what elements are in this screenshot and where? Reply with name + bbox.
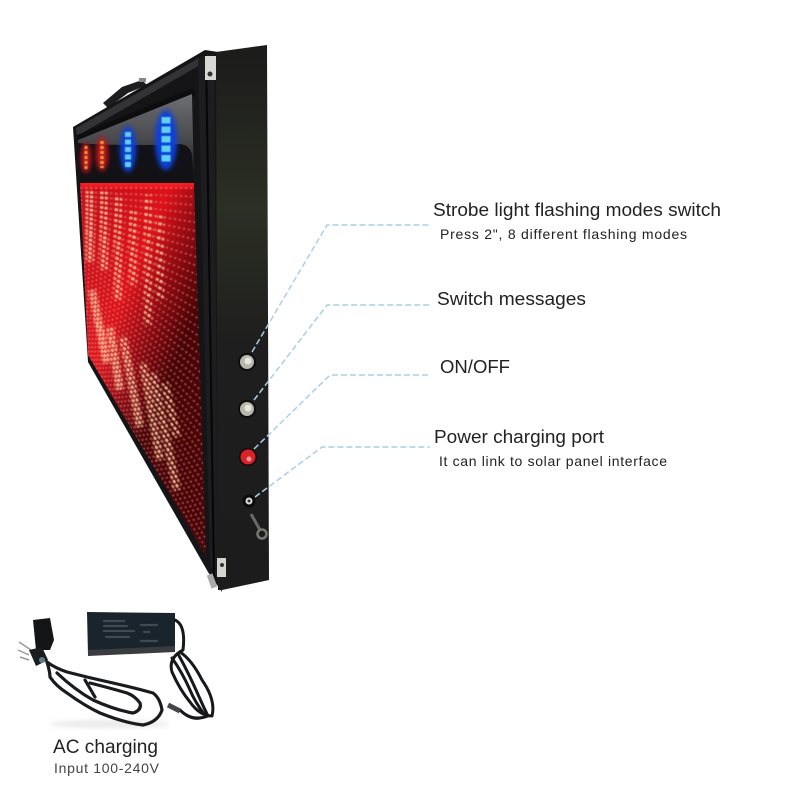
black panel with reflection above the LED matrix <box>78 94 194 183</box>
callout: power charging port: Power charging port <box>434 426 605 447</box>
callout lines <box>252 225 430 497</box>
LED sign product photo <box>73 45 269 592</box>
red power button <box>239 448 257 466</box>
carrying handle <box>103 78 147 108</box>
front frame <box>73 50 222 592</box>
AC charging caption: Input 100-240V <box>54 760 160 776</box>
adapter cable <box>171 620 213 718</box>
IEC connector <box>33 618 54 650</box>
right side panel <box>216 45 269 590</box>
AC charging caption <box>53 736 160 776</box>
LED matrix display <box>80 178 206 557</box>
callout: power charging port <box>434 426 667 469</box>
strobe switch button <box>238 353 256 371</box>
charging port <box>242 494 256 508</box>
lit message letters <box>84 188 182 492</box>
blue strobe 1 <box>120 126 136 172</box>
AC power adapter photo <box>18 612 213 728</box>
callout: strobe light flashing modes switch <box>433 199 721 242</box>
mains plug <box>18 642 48 666</box>
blue strobe 2 <box>155 110 177 170</box>
DC plug <box>168 705 180 711</box>
callout: on/off: ON/OFF <box>440 357 510 377</box>
strobe lights <box>81 110 177 173</box>
AC charging caption: AC charging <box>53 736 158 758</box>
callout: strobe light flashing modes switch: Press 2", 8 different flashing modes <box>440 226 687 242</box>
port cap <box>251 514 266 538</box>
AC cord <box>47 662 162 725</box>
adapter box <box>87 612 175 656</box>
adapter shadow <box>50 720 170 728</box>
red strobe 2 <box>96 137 108 171</box>
top bracket <box>205 56 216 80</box>
bottom bracket <box>207 558 226 589</box>
callout: switch messages: Switch messages <box>437 288 586 309</box>
callout: power charging port: It can link to solar panel interface <box>439 453 667 469</box>
red strobe 1 <box>81 143 91 173</box>
callout: strobe light flashing modes switch: Strobe light flashing modes switch <box>433 199 721 220</box>
message switch button <box>238 400 256 418</box>
